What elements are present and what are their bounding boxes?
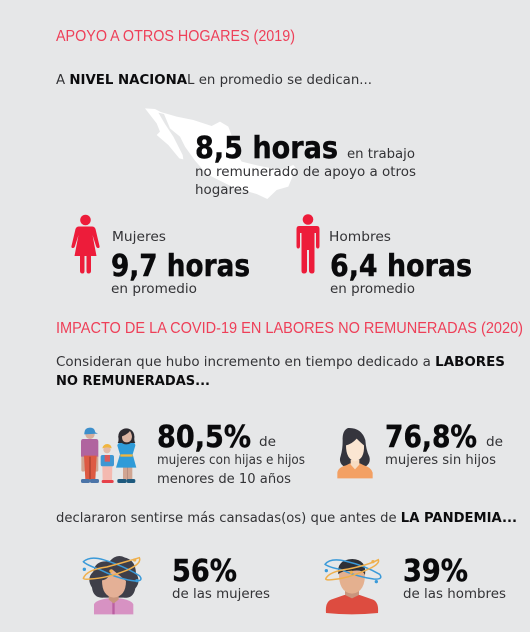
intro text: nivel nacional: A NIVEL NACIONAL en promedio se dedican...	[56, 73, 372, 88]
icon: family	[81, 428, 136, 483]
stat: 39%	[403, 554, 506, 602]
text: declararon sentirse más cansadas: declararon sentirse más cansadas(os) que antes de LA PANDEMIA...	[56, 511, 517, 526]
stat: hombres: en promedio	[330, 282, 415, 297]
stat: 56%: 56%	[172, 554, 237, 589]
stat: 8,5 horas: 8,5 horas	[195, 131, 338, 166]
stat: 80,5%: de	[259, 435, 276, 450]
stat: 56%: de las mujeres	[172, 587, 270, 602]
stat: mujeres: 9,7 horas	[111, 249, 250, 284]
stat: 8,5 horas: hogares	[195, 183, 249, 198]
stat: mujeres: en promedio	[111, 282, 197, 297]
stat: mujeres	[111, 230, 250, 297]
stat: hombres: Hombres	[329, 230, 391, 245]
stat: 76,8%: 76,8%	[385, 420, 477, 455]
stat: mujeres: Mujeres	[112, 230, 166, 245]
icon: woman	[71, 215, 100, 274]
stat: 80,5%	[157, 420, 305, 487]
stat: 8,5 horas	[195, 131, 416, 198]
stat: 80,5%: mujeres con hijas e hijos	[157, 453, 305, 468]
icon: map of Mexico	[145, 108, 296, 199]
stat: 39%: de las hombres	[403, 587, 506, 602]
heading: apoyo a otros hogares: APOYO A OTROS HOGARES (2019)	[56, 28, 295, 45]
stat: 39%: 39%	[403, 554, 468, 589]
icon: dizzy woman	[83, 556, 141, 614]
intro text: labores no remuneradas: Consideran que hubo incremento en tiempo dedicado a LABORES	[56, 355, 505, 370]
icon: woman without children	[337, 428, 373, 478]
stat: 8,5 horas: en trabajo	[347, 147, 415, 162]
icon: man	[296, 214, 320, 274]
stat: hombres	[329, 230, 472, 297]
stat: 76,8%: mujeres sin hijos	[385, 453, 496, 468]
stat: 8,5 horas: no remunerado de apoyo a otros	[195, 165, 416, 180]
stat: hombres: 6,4 horas	[330, 249, 472, 284]
intro text: labores no remuneradas	[56, 355, 505, 389]
stat: 56%	[172, 554, 270, 602]
icon: dizzy man	[325, 559, 381, 614]
stat: 80,5%: 80,5%	[157, 420, 251, 455]
stat: 76,8%: de	[486, 435, 503, 450]
stat: 80,5%: menores de 10 años	[157, 472, 291, 487]
intro text: labores no remuneradas: NO REMUNERADAS...	[56, 374, 210, 389]
stat: 76,8%	[385, 420, 503, 468]
